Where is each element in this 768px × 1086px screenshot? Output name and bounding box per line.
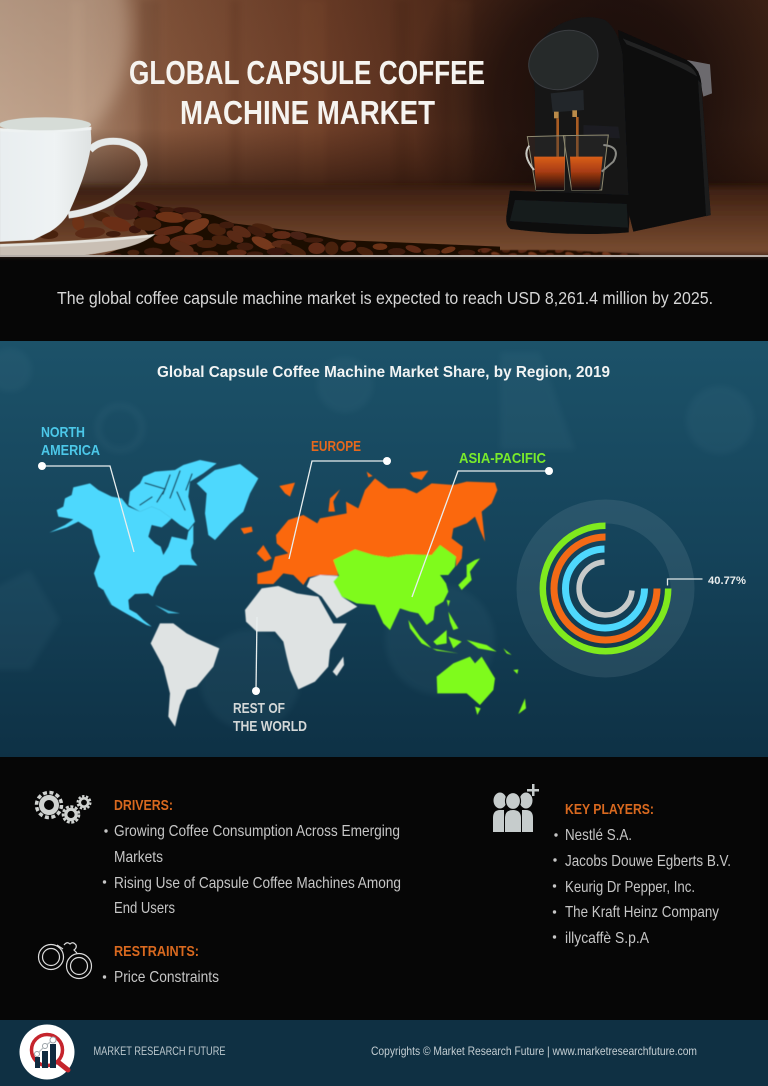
map region: north america (49, 460, 258, 627)
callout: rest of the world: THE WORLD (233, 719, 307, 735)
world map (49, 460, 526, 727)
title (129, 54, 485, 131)
icon: gears (36, 792, 90, 822)
callout: rest of the world: REST OF (233, 701, 285, 717)
key player list: Nestlé S.A. (565, 827, 632, 844)
panel: regional market share (0, 341, 768, 757)
driver list: Growing Coffee Consumption Across Emerging (114, 823, 400, 840)
panel: restraints (38, 943, 219, 986)
key player list: The Kraft Heinz Company (565, 904, 719, 921)
panel: drivers (36, 792, 401, 917)
radial chart: regional share (528, 512, 702, 666)
copyright: Copyrights © Market Research Future | www.marketresearchfuture.com (371, 1044, 697, 1058)
callout: north america: NORTH (41, 425, 85, 441)
coffee beans (38, 200, 500, 259)
callout: asia-pacific (412, 451, 553, 597)
chart title: Global Capsule Coffee Machine Market Share, by Region, 2019 (157, 364, 610, 381)
map region: asia-pacific (333, 545, 526, 715)
icon: logo (20, 1024, 74, 1080)
key player list: illycaffè S.p.A (565, 930, 649, 947)
brand name: MARKET RESEARCH FUTURE (94, 1044, 226, 1058)
panel: key players (493, 784, 731, 947)
callout: rest of the world (233, 617, 307, 735)
coffee machine (506, 17, 712, 234)
map region: rest of the world (151, 575, 357, 727)
driver list: Markets (114, 849, 163, 866)
heading: key players: KEY PLAYERS: (565, 801, 654, 818)
far bean scatter (480, 250, 640, 255)
callout: north america: AMERICA (41, 443, 100, 459)
driver list (103, 823, 401, 917)
coffee cup and saucer (0, 117, 287, 257)
restraint list: Price Constraints (114, 969, 219, 986)
callout: europe (289, 439, 391, 559)
icon: handcuffs (38, 943, 92, 978)
driver list: End Users (114, 900, 175, 917)
beans in front of saucer (105, 235, 287, 257)
callout: asia-pacific: ASIA-PACIFIC (459, 451, 546, 467)
title: MACHINE MARKET (180, 94, 435, 131)
callout: europe: EUROPE (311, 439, 361, 455)
map region: europe and russia (241, 471, 497, 585)
heading: drivers: DRIVERS: (114, 797, 173, 814)
key player list: Jacobs Douwe Egberts B.V. (565, 853, 731, 870)
chart value label: 40.77% (708, 575, 746, 587)
key player list (553, 827, 731, 947)
icon: people (493, 784, 539, 832)
footer (0, 1020, 768, 1086)
title: GLOBAL CAPSULE COFFEE (129, 54, 485, 91)
map: arctic channels (103, 471, 192, 605)
driver list: Rising Use of Capsule Coffee Machines Among (114, 875, 401, 892)
market forecast statement: The global coffee capsule machine market is expected to reach USD 8,261.4 million by 2025. (57, 288, 713, 308)
callout: north america (38, 425, 134, 552)
heading: restraints: RESTRAINTS: (114, 943, 199, 960)
key player list: Keurig Dr Pepper, Inc. (565, 879, 695, 896)
hero banner photo (0, 0, 768, 259)
